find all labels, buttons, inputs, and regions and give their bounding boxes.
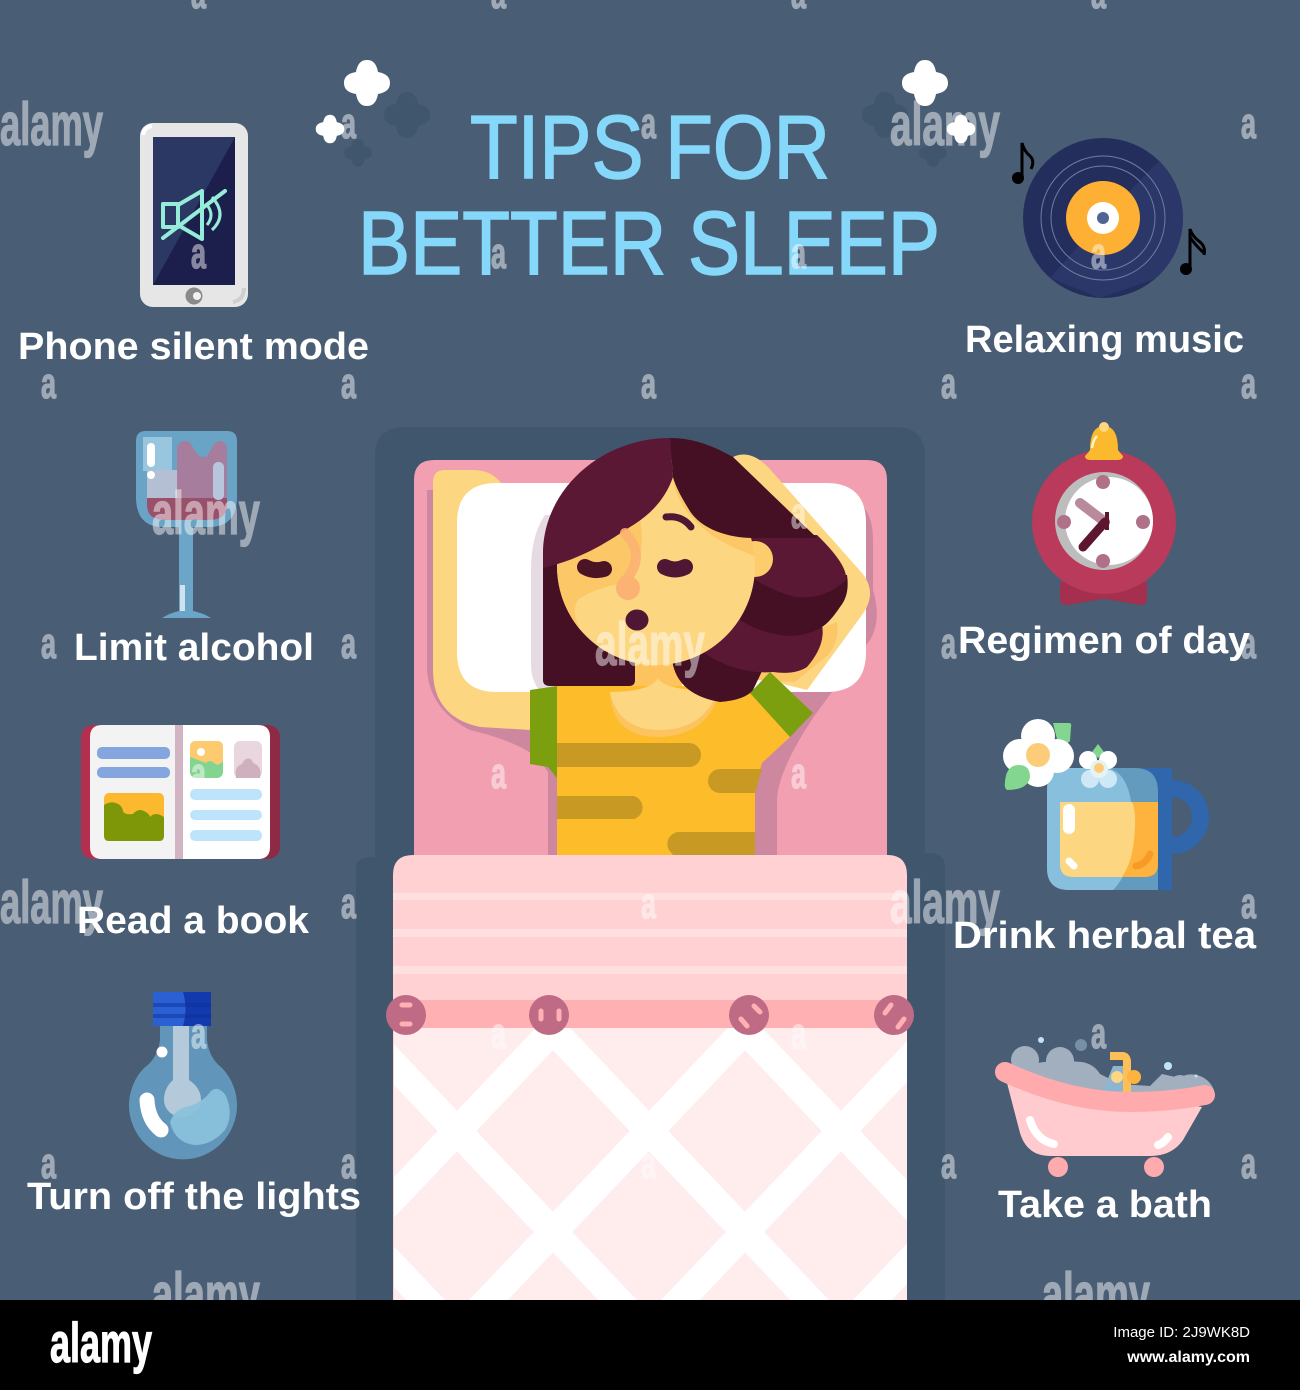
bubbles <box>1038 1037 1044 1043</box>
right arm inner shade <box>755 622 838 682</box>
hair curl dark middle <box>740 570 848 636</box>
watermark: a <box>41 619 56 668</box>
icon: phone silent <box>140 123 248 307</box>
watermark: a <box>941 619 956 668</box>
label: relaxing music: Relaxing music <box>965 319 1244 361</box>
icon: alarm clock <box>1032 422 1176 605</box>
watermark: alamy <box>890 869 1000 936</box>
shirt <box>557 686 790 855</box>
icon: herbal tea mug <box>1003 719 1209 890</box>
foam <box>1011 1046 1214 1102</box>
watermark: alamy <box>152 1261 260 1328</box>
hair shadow on pillow <box>531 515 559 693</box>
nose <box>623 533 636 583</box>
eyebrow <box>666 517 691 527</box>
watermark: a <box>791 229 806 278</box>
watermark: a <box>191 749 206 798</box>
face shade <box>557 478 754 630</box>
music note right <box>1180 229 1204 275</box>
watermark: a <box>641 359 656 408</box>
icon: vinyl record with notes <box>1012 138 1204 298</box>
ear <box>737 541 773 577</box>
watermark: a <box>341 879 356 928</box>
buttons <box>386 995 914 1035</box>
watermark: a <box>641 99 656 148</box>
hair front left <box>543 438 673 568</box>
title decorative stars <box>316 60 975 167</box>
watermark: a <box>641 1139 656 1188</box>
footer url: www.alamy.com <box>1126 1349 1250 1366</box>
music note left <box>1012 143 1033 184</box>
watermark: a <box>341 1139 356 1188</box>
title: BETTER SLEEP <box>358 194 940 294</box>
icon: light bulb <box>129 992 237 1159</box>
label: take a bath: Take a bath <box>998 1184 1212 1226</box>
watermark: a <box>491 749 506 798</box>
right arm <box>690 455 870 690</box>
title: TIPS FOR <box>470 98 830 198</box>
watermark: a <box>1241 359 1256 408</box>
tub body <box>1007 1083 1202 1156</box>
fitted sheet <box>414 460 887 856</box>
watermark: a <box>791 749 806 798</box>
footer logo: alamy <box>50 1311 152 1374</box>
watermark: a <box>1241 879 1256 928</box>
bed frame <box>356 427 945 1300</box>
label: read a book: Read a book <box>77 900 310 942</box>
label: regimen of day: Regimen of day <box>958 620 1250 662</box>
watermark: a <box>791 1009 806 1058</box>
watermark: a <box>41 1139 56 1188</box>
icon: open book <box>81 725 280 859</box>
hair curl purple lower <box>700 610 823 673</box>
watermark: a <box>1241 1139 1256 1188</box>
right sleeve <box>750 672 813 737</box>
watermark: a <box>1091 229 1106 278</box>
hair front right <box>670 438 817 538</box>
watermark: a <box>191 1009 206 1058</box>
watermark: alamy <box>0 869 103 936</box>
collar skin <box>610 692 718 737</box>
watermark: a <box>641 879 656 928</box>
watermark: a <box>941 359 956 408</box>
lower duvet pattern <box>394 1028 907 1300</box>
tub rim <box>1005 1072 1205 1102</box>
hair lowest curl <box>670 640 765 702</box>
watermark: a <box>491 1009 506 1058</box>
left arm <box>433 470 531 730</box>
pillow <box>457 483 866 692</box>
watermark: a <box>1091 1009 1106 1058</box>
watermark: a <box>1241 619 1256 668</box>
bed <box>356 427 945 1300</box>
mouth <box>626 610 648 630</box>
footer bar <box>0 1300 1300 1390</box>
watermark: a <box>791 489 806 538</box>
watermark: a <box>341 359 356 408</box>
watermark: a <box>41 359 56 408</box>
eyes <box>585 567 604 570</box>
hair curl purple upper <box>745 535 846 597</box>
tub highlights <box>1030 1120 1168 1145</box>
watermark: a <box>341 619 356 668</box>
watermark: a <box>191 229 206 278</box>
watermark: a <box>941 1139 956 1188</box>
label: limit alcohol: Limit alcohol <box>74 627 314 669</box>
label: drink herbal tea: Drink herbal tea <box>953 915 1257 957</box>
watermark: alamy <box>152 480 260 547</box>
icon: bathtub <box>1005 1037 1214 1177</box>
shirt stripes <box>557 743 762 855</box>
shadow: right arm <box>745 500 877 855</box>
left sleeve <box>530 686 557 778</box>
blanket stripes <box>393 893 907 974</box>
faucet <box>1101 1066 1125 1096</box>
flower small <box>1079 744 1117 788</box>
flower large <box>1003 719 1074 790</box>
face <box>557 467 755 665</box>
watermark: alamy <box>0 91 103 158</box>
tub feet <box>1048 1157 1068 1177</box>
watermark: alamy <box>890 91 1000 158</box>
watermark: alamy <box>1042 1261 1150 1328</box>
title <box>358 98 940 294</box>
hair back left <box>543 560 635 686</box>
blanket <box>393 855 907 1300</box>
label: turn off the lights: Turn off the lights <box>27 1176 361 1218</box>
neck <box>610 660 690 725</box>
watermark: a <box>491 229 506 278</box>
watermark: a <box>1241 99 1256 148</box>
footer image id: Image ID: 2J9WK8D <box>1113 1324 1250 1341</box>
watermark: alamy <box>595 611 705 678</box>
shadow: left arm <box>427 490 560 855</box>
watermark: a <box>341 99 356 148</box>
icon: wine glass <box>136 431 237 618</box>
blanket band <box>393 1000 907 1028</box>
label: phone silent mode: Phone silent mode <box>18 326 369 368</box>
